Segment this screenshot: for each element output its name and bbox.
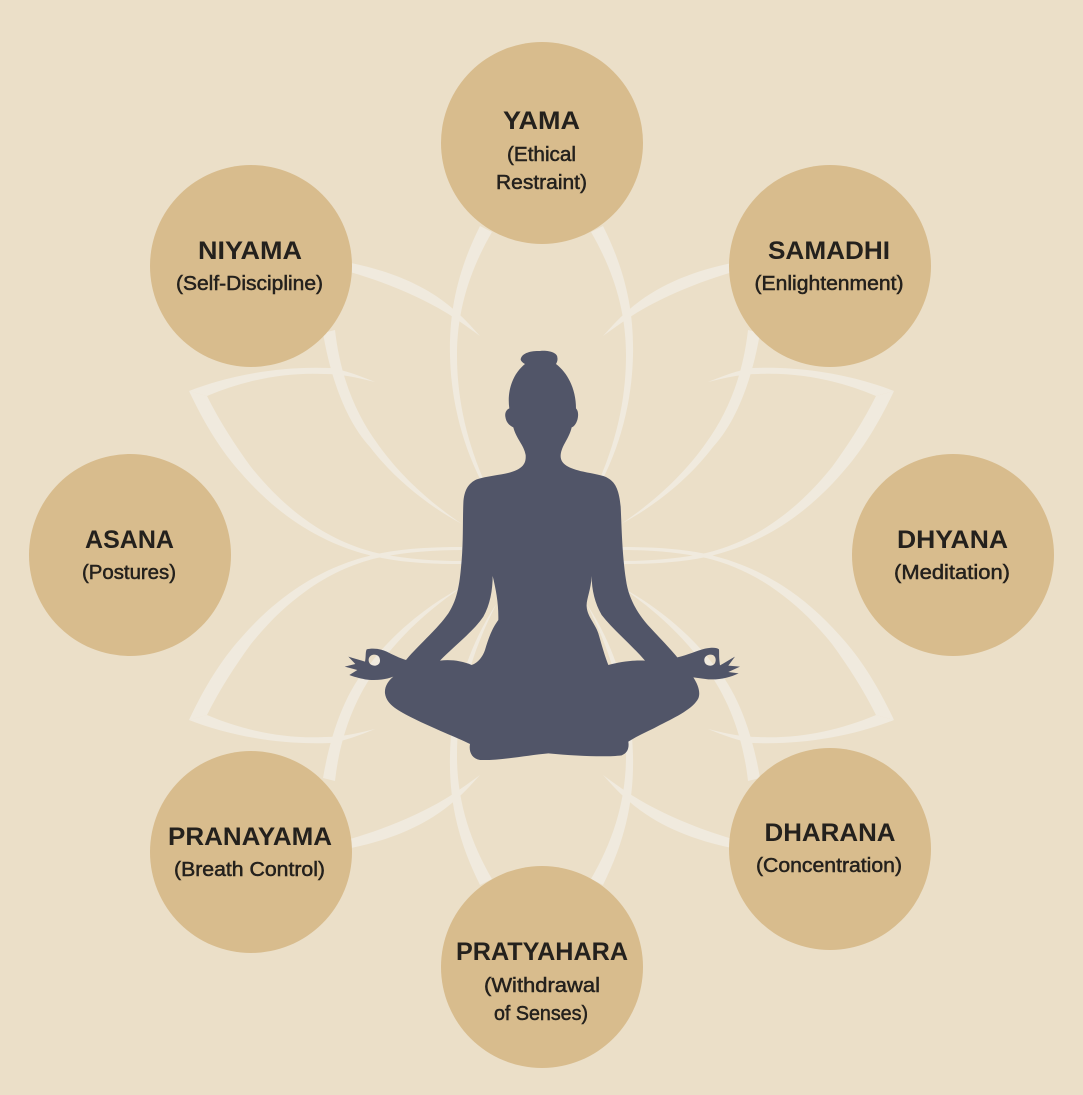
circle: DHARANA: DHARANA	[764, 819, 896, 847]
circle: DHARANA: (Concentration)	[756, 855, 902, 877]
circle: PRANAYAMA: (Breath Control)	[174, 859, 325, 881]
circle: DHYANA	[852, 454, 1054, 656]
circle: YAMA: Restraint)	[496, 172, 587, 194]
circle: SAMADHI: SAMADHI	[768, 237, 890, 265]
circle: DHYANA: DHYANA	[897, 526, 1008, 554]
circle: SAMADHI	[729, 165, 931, 367]
circle: PRATYAHARA: of Senses)	[494, 1003, 588, 1025]
circle: PRANAYAMA	[150, 751, 352, 953]
lotus petal outline	[189, 226, 894, 885]
circle: PRATYAHARA: (Withdrawal	[484, 975, 600, 997]
circle: YAMA: YAMA	[503, 107, 580, 135]
circle: PRATYAHARA: PRATYAHARA	[456, 938, 628, 966]
circle: PRANAYAMA: PRANAYAMA	[168, 823, 332, 851]
circle: SAMADHI: (Enlightenment)	[754, 273, 904, 295]
circle: YAMA: (Ethical	[507, 144, 576, 166]
circle: NIYAMA: NIYAMA	[198, 237, 302, 265]
circle: DHARANA	[729, 748, 931, 950]
circle: YAMA	[441, 42, 643, 244]
circle: ASANA	[29, 454, 231, 656]
circle: PRATYAHARA	[441, 866, 643, 1068]
circle: NIYAMA	[150, 165, 352, 367]
circle: ASANA: (Postures)	[82, 562, 176, 584]
circle: DHYANA: (Meditation)	[894, 562, 1010, 584]
circle: NIYAMA: (Self-Discipline)	[176, 273, 323, 295]
icon: meditating figure silhouette	[345, 351, 740, 760]
circle: ASANA: ASANA	[85, 526, 174, 554]
